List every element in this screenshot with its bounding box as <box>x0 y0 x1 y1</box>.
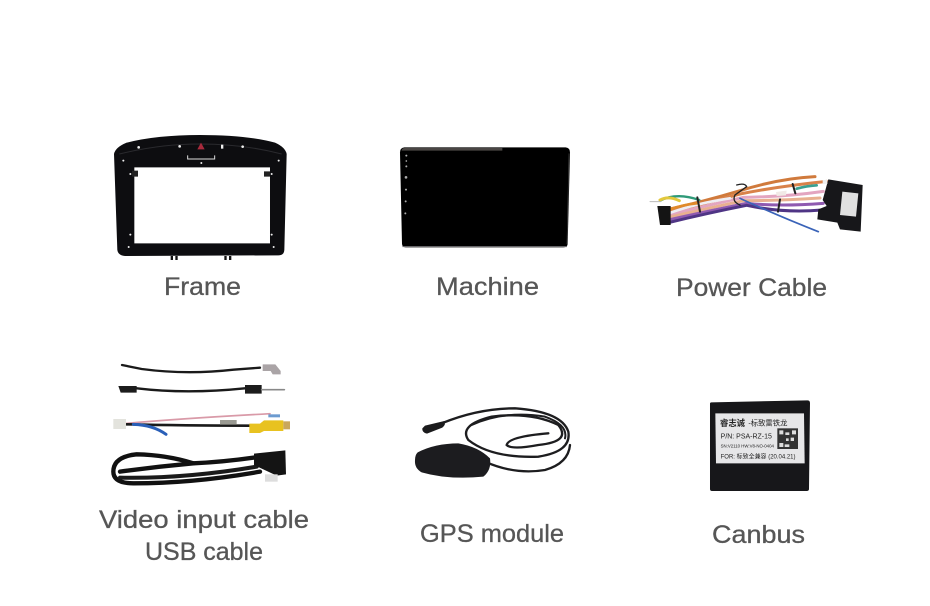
label: Video input cable USB cable: Video input cable <box>99 506 309 534</box>
icon: wiring harness <box>650 177 863 232</box>
icon: QR code <box>777 428 798 449</box>
panel: machine item <box>400 147 570 301</box>
icon: cable set <box>113 364 290 483</box>
label: Canbus: Canbus <box>712 521 805 549</box>
icon: Canbus box: FOR: 标致全兼容 (20.04.21) <box>721 452 795 460</box>
cable four: USB <box>113 450 286 483</box>
icon: Canbus box: SN:V2110 HW:V8-NO-0404 <box>721 443 775 448</box>
panel: video and USB cable item <box>99 364 309 566</box>
icon: Canbus box: 睿志诚 <box>720 418 746 428</box>
label: GPS module: GPS module <box>420 520 564 548</box>
cable one <box>122 364 281 374</box>
label: Power Cable: Power Cable <box>676 274 827 302</box>
cable two <box>118 385 284 394</box>
panel: GPS module item <box>415 408 570 548</box>
icon: Canbus box <box>710 400 810 491</box>
icon: head unit screen <box>400 147 570 247</box>
panel: power cable item <box>650 177 863 302</box>
label: Video input cable USB cable <box>99 506 309 566</box>
label: Video input cable USB cable: USB cable <box>145 538 263 566</box>
icon: Canbus box: -标致雷铁龙 <box>748 419 788 428</box>
panel: frame item <box>114 135 287 301</box>
label: Machine: Machine <box>436 273 539 301</box>
panel: Canbus item <box>710 400 810 549</box>
icon: black dash frame <box>114 135 287 260</box>
icon: Canbus box: P/N: PSA-RZ-15 <box>721 434 772 441</box>
icon: hazard triangle <box>197 143 205 149</box>
cable three: RCA <box>113 414 290 434</box>
label: Frame: Frame <box>164 273 241 301</box>
icon: GPS antenna <box>415 408 570 478</box>
